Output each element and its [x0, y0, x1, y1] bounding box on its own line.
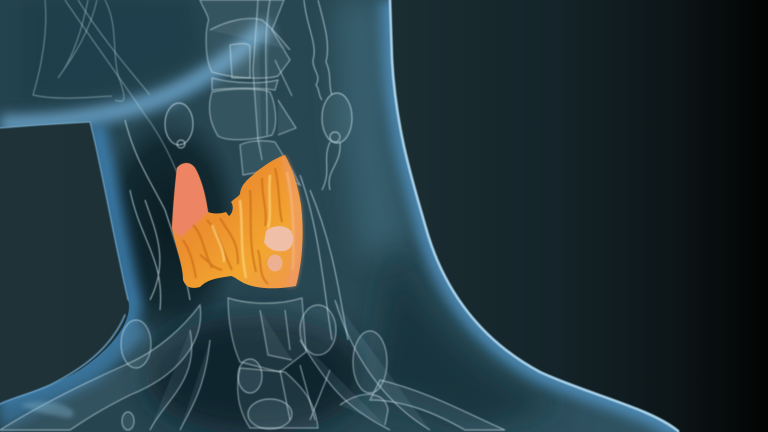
left neck blue glow	[0, 125, 132, 404]
right neck lighter area	[335, 0, 410, 260]
nodule large	[264, 226, 293, 251]
cervical spine	[200, 0, 318, 428]
thyroid darker texture	[183, 168, 282, 284]
jaw dark region	[36, 5, 193, 94]
right rim inner glow	[390, 0, 680, 432]
thyroid highlights	[212, 172, 294, 278]
dark neck interior	[116, 120, 234, 328]
left shoulder tone	[0, 322, 150, 430]
left lymph node	[125, 103, 193, 310]
right vessel with lymph node	[300, 0, 352, 340]
dark central chest shadow	[145, 315, 365, 432]
left chest highlight	[20, 402, 74, 418]
thyroid left lobe pink	[172, 163, 208, 238]
jaw underside glow band	[0, 25, 268, 124]
right neck shade	[372, 262, 550, 432]
thyroid body	[172, 155, 303, 288]
thyroid gland	[172, 155, 303, 288]
lower neck vessels and nodes	[0, 300, 505, 430]
thyroid right edge tint	[281, 155, 303, 287]
nodule small	[268, 254, 282, 272]
jaw and skull outlines	[33, 0, 178, 175]
